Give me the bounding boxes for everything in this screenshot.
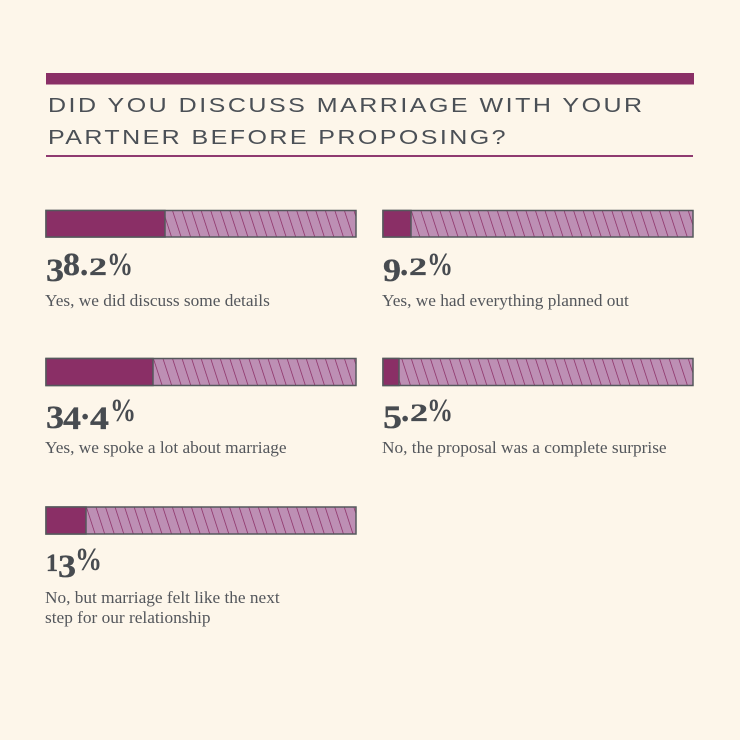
value: 34.4% (46, 391, 136, 437)
value: 38.2%: % (107, 247, 133, 283)
value: 5.2%: % (427, 393, 453, 429)
value: 38.2%: 2 (89, 254, 107, 281)
title underline (46, 155, 693, 157)
value: 9.2%: . (400, 247, 408, 283)
value: 13%: 1 (46, 550, 58, 577)
value: 38.2% (46, 247, 133, 289)
value: 13% (46, 542, 102, 585)
label: step for our relationship (45, 608, 211, 627)
label: Yes, we did discuss some details (45, 291, 270, 310)
label: Yes, we spoke a lot about marriage (45, 438, 287, 457)
label: No, but marriage felt like the next (45, 588, 280, 607)
bar: 38.2% (46, 210, 356, 237)
value: 5.2% (383, 393, 453, 436)
value: 5.2%: 5 (383, 400, 402, 436)
value: 5.2%: 2 (410, 400, 428, 427)
value: 34.4%: 4 (63, 401, 81, 437)
panel: 38.2% (45, 210, 356, 310)
value: 9.2%: % (427, 247, 453, 283)
value: 34.4%: % (110, 393, 136, 429)
value: 13%: % (75, 542, 102, 578)
panel: 5.2% (382, 358, 693, 457)
value: 5.2%: . (401, 393, 409, 429)
bar: 5.2% (383, 358, 693, 386)
value: 9.2%: 2 (409, 254, 427, 281)
header accent bar (46, 73, 694, 84)
value: 13%: 3 (58, 549, 76, 585)
bar: 9.2% (383, 210, 693, 237)
bar: 13% (46, 507, 356, 534)
bar: 34.4% (46, 358, 356, 386)
panel: 9.2% (382, 210, 693, 310)
value: 38.2%: 3 (46, 253, 64, 289)
value: 34.4%: 4 (90, 401, 109, 437)
value: 34.4%: 3 (46, 400, 64, 436)
value: 38.2%: 8 (63, 247, 80, 283)
title (48, 93, 642, 148)
title: DID YOU DISCUSS MARRIAGE WITH YOUR (48, 93, 642, 116)
label: No, the proposal was a complete surprise (382, 438, 667, 457)
label: Yes, we had everything planned out (382, 291, 629, 310)
panel: 13% (45, 507, 356, 627)
value: 9.2%: 9 (383, 253, 401, 289)
value: 34.4%: . (81, 391, 89, 427)
value: 38.2%: . (80, 247, 88, 283)
title: PARTNER BEFORE PROPOSING? (48, 125, 506, 148)
value: 9.2% (383, 247, 453, 289)
panel: 34.4% (45, 358, 356, 457)
